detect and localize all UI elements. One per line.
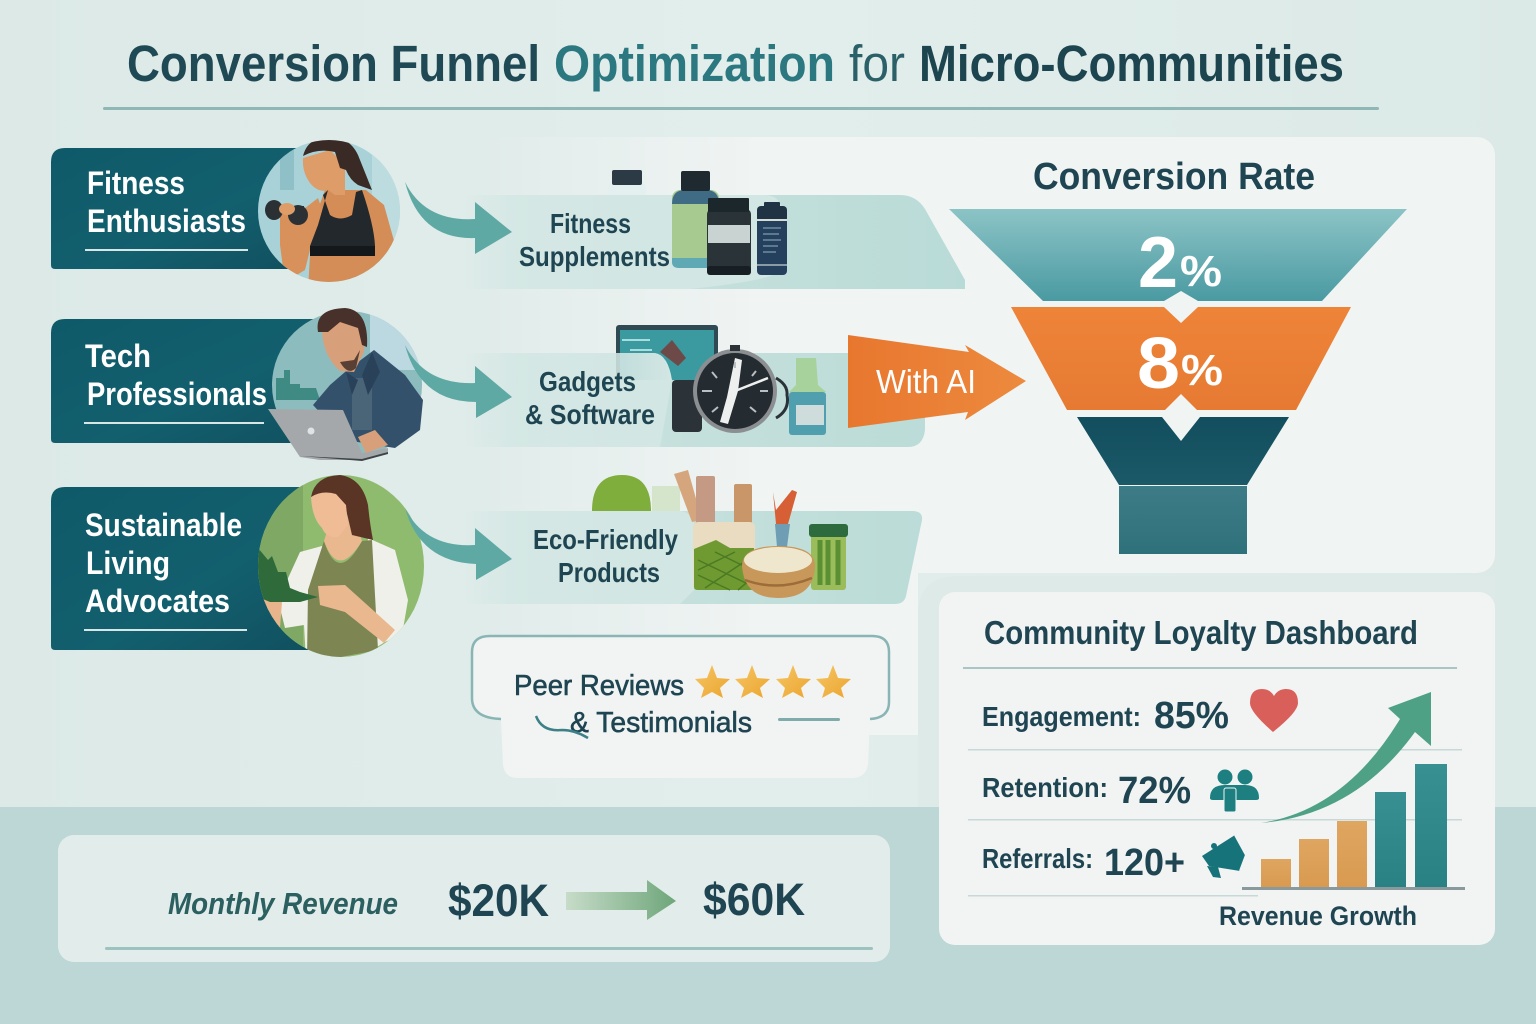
heading: conversion rate: Conversion Rate <box>1033 156 1315 198</box>
callout: with AI arrow: With AI <box>876 363 976 400</box>
panel: peer reviews <box>472 636 889 778</box>
icon: four stars <box>695 665 851 698</box>
label: sustainable living advocates: Living <box>86 545 170 581</box>
metric: engagement: Engagement: <box>982 701 1141 732</box>
icon: gadgets <box>470 325 826 447</box>
title: for <box>849 35 905 92</box>
product band: gadgets and software <box>460 325 925 447</box>
metric: retention: Retention: <box>982 772 1108 803</box>
arrow: growth <box>1261 692 1431 823</box>
label: monthly revenue: Monthly Revenue <box>168 886 398 921</box>
funnel stage: 8 percent: 8 <box>1137 324 1180 404</box>
icon: eco products <box>470 470 848 604</box>
label: peer reviews and testimonials: & Testimonials <box>570 707 752 739</box>
arrow: sustainable to eco <box>405 508 512 580</box>
value: 20K: $20K <box>448 875 549 926</box>
funnel stage: 2 percent: 2 <box>1138 223 1178 303</box>
title: Micro-Communities <box>919 35 1344 92</box>
icon: woman with plants <box>258 475 424 660</box>
label: fitness enthusiasts: Enthusiasts <box>87 203 246 239</box>
panel: community loyalty dashboard <box>939 592 1495 945</box>
product band: fitness supplements <box>460 170 965 289</box>
title: Conversion Funnel <box>127 35 540 92</box>
label: eco-friendly products <box>533 524 678 588</box>
chart: revenue growth bars <box>1242 764 1465 890</box>
title <box>127 35 1344 92</box>
product band: eco-friendly products <box>460 470 922 604</box>
metric: engagement: 85% <box>1154 695 1229 737</box>
icon: people <box>1210 770 1259 812</box>
metric: retention: 72% <box>1118 770 1191 812</box>
label: revenue growth: Revenue Growth <box>1219 901 1417 931</box>
label: peer reviews and testimonials: Peer Reviews <box>514 670 684 702</box>
icon: woman with dumbbell <box>258 137 402 290</box>
label: sustainable living advocates <box>84 507 247 631</box>
segment: fitness enthusiasts <box>51 137 402 290</box>
funnel stage: lower <box>1077 417 1289 485</box>
label: tech professionals: Tech <box>85 338 151 374</box>
chart: conversion funnel <box>949 209 1407 554</box>
label: sustainable living advocates: Advocates <box>85 583 230 619</box>
segment: sustainable living advocates <box>51 475 424 660</box>
label: sustainable living advocates: Sustainable <box>85 507 242 543</box>
label: tech professionals: Professionals <box>87 376 267 412</box>
arrow: fitness to supplements <box>405 182 512 254</box>
funnel stage: 2 percent: % <box>1180 247 1222 296</box>
label: fitness supplements: Supplements <box>519 241 670 272</box>
value: 60K: $60K <box>703 874 805 925</box>
arrow: revenue increase <box>566 880 676 920</box>
label: gadgets and software <box>525 366 655 430</box>
label: fitness supplements: Fitness <box>550 208 631 239</box>
callout: with AI arrow <box>848 335 1026 428</box>
metric: referrals <box>982 842 1185 884</box>
arrow: tech to gadgets <box>405 345 512 418</box>
label: tech professionals <box>84 338 267 424</box>
funnel stage: 8 percent <box>1011 307 1351 410</box>
metric: retention <box>982 770 1191 812</box>
heading: community loyalty dashboard: Community Loyalty Dashboard <box>984 614 1418 651</box>
funnel stage: 8 percent: % <box>1181 346 1223 395</box>
icon: megaphone <box>1202 835 1246 878</box>
label: eco-friendly products: Eco-Friendly <box>533 524 678 555</box>
icon: supplement bottles <box>608 170 787 275</box>
label: fitness supplements <box>519 208 670 272</box>
icon: heart <box>1250 689 1298 732</box>
segment: tech professionals <box>51 308 430 461</box>
label: peer reviews and testimonials <box>514 670 752 739</box>
label: eco-friendly products: Products <box>558 557 660 588</box>
icon: man with laptop <box>268 308 430 461</box>
funnel stem <box>1119 486 1247 554</box>
label: fitness enthusiasts: Fitness <box>87 165 185 201</box>
label: gadgets and software: & Software <box>525 399 655 430</box>
funnel stage: 2 percent <box>949 209 1407 303</box>
metric: referrals: 120+ <box>1104 842 1185 884</box>
panel: monthly revenue <box>58 835 890 962</box>
metric: engagement <box>982 695 1229 737</box>
title: Optimization <box>554 35 835 92</box>
metric: referrals: Referrals: <box>982 843 1093 874</box>
label: fitness enthusiasts <box>85 165 248 251</box>
label: gadgets and software: Gadgets <box>539 366 636 397</box>
